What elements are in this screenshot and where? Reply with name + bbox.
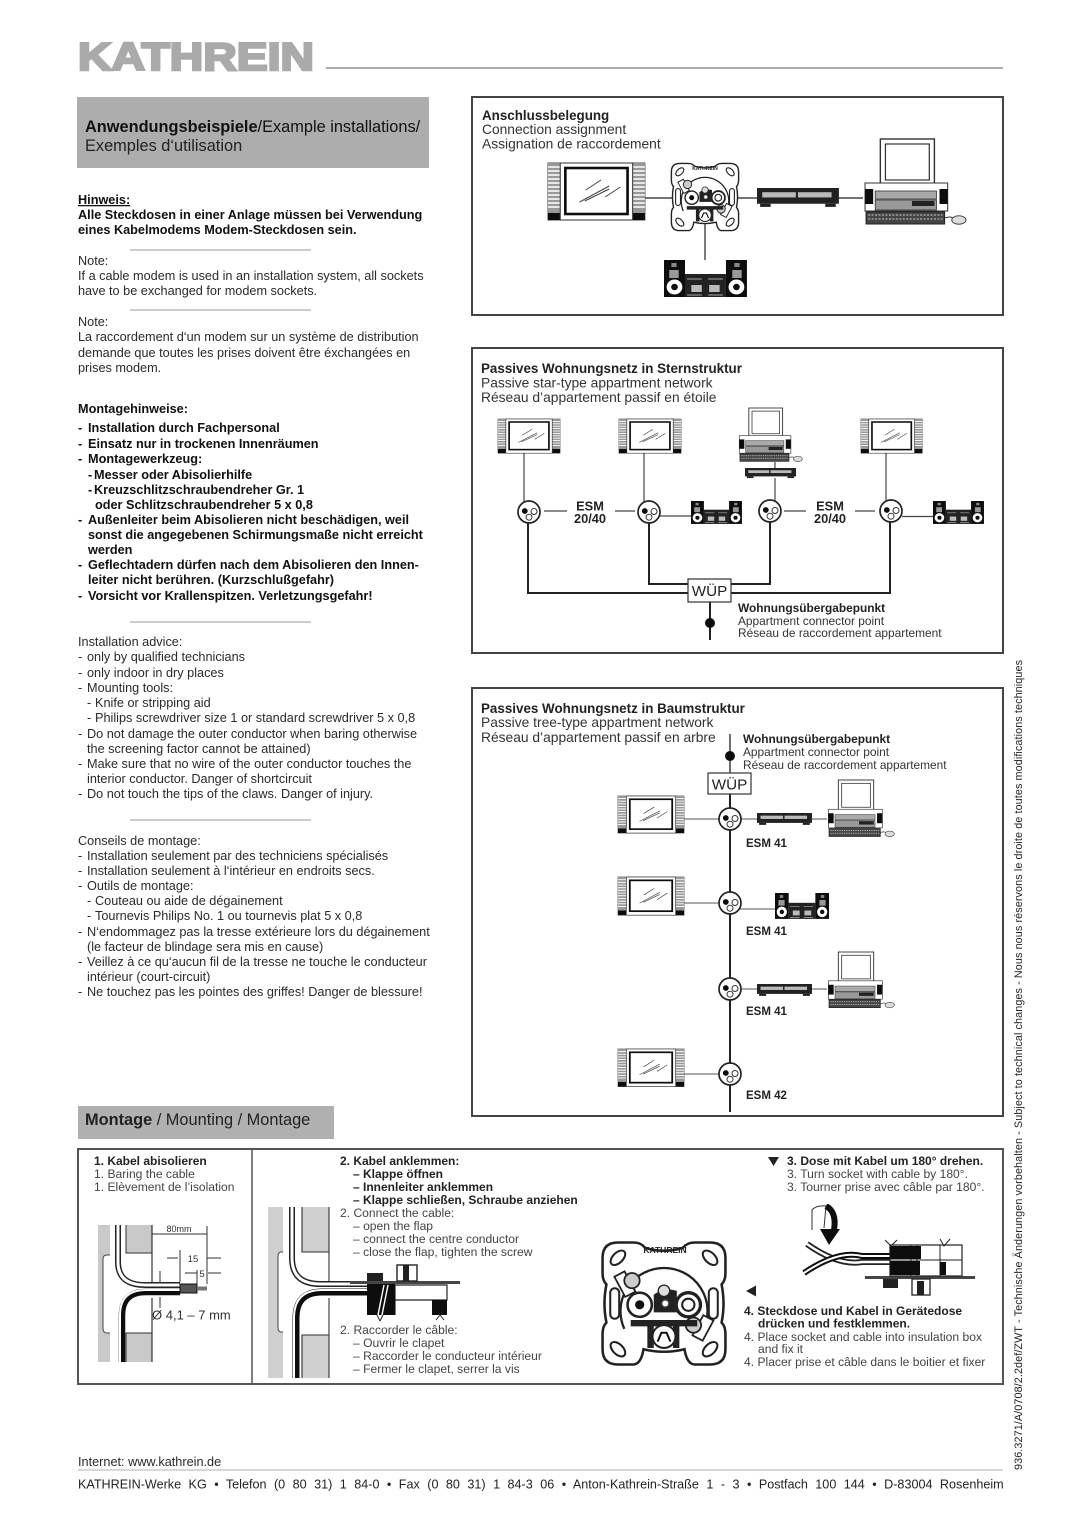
text block: Hinweis German note: Hinweis: (78, 193, 130, 207)
legend: Wohnungsübergabepunkt (738, 601, 942, 640)
heading panel: Montage (78, 1106, 334, 1139)
text block: Conseils de montage: - (87, 909, 91, 923)
text block: Montagehinweise German: sonst die angegebenen Schirmungsmaße nicht erreicht (88, 528, 424, 542)
text block: Installation advice: Knife or stripping aid (95, 696, 211, 710)
text block: English note: If a cable modem is used in an installation system, all sockets (78, 269, 424, 283)
panel heading: Anschlussbelegung (482, 108, 609, 123)
text block: Installation advice: only by qualified technicians (87, 650, 245, 664)
text block: Conseils de montage: - (78, 879, 82, 893)
arrow: step 3 down (768, 1157, 779, 1166)
text block: Conseils de montage: - (78, 849, 82, 863)
label: ESM 20/40 right: ESM (816, 498, 844, 514)
text block: Conseils de montage: - (78, 985, 82, 999)
text block: Conseils de montage: Installation seulement à l‘intérieur en endroits secs. (87, 864, 375, 878)
text block: Montagehinweise German: oder Schlitzschraubendreher 5 x 0,8 (95, 498, 313, 512)
step 2 text: – Fermer le clapet, serrer la vis (353, 1362, 520, 1376)
labels: ESM types (746, 838, 788, 1102)
socket front view with logo: KATHREIN (643, 1245, 687, 1255)
text block: Conseils de montage: Installation seulement par des techniciens spécialisés (87, 849, 388, 863)
text block: Conseils de montage: intérieur (court-circuit) (87, 970, 210, 984)
step 2 text (340, 1154, 578, 1376)
panel heading: Passives Wohnungsnetz in Sternstruktur (481, 361, 743, 376)
text block: Conseils de montage: - (78, 955, 82, 969)
legend: Wohnungsübergabepunkt: Appartment connector point (743, 745, 890, 759)
text block: Montagehinweise German: Montagewerkzeug: (88, 452, 202, 466)
step 2 text: – open the flap (353, 1219, 433, 1233)
text block: Montagehinweise German: Einsatz nur in trockenen Innenräumen (88, 437, 319, 451)
footer: internet address: Internet: www.kathrein.de (78, 1455, 221, 1469)
text block: Conseils de montage: N‘endommagez pas la tresse extérieure lors du dégainement (87, 925, 430, 939)
panel heading (481, 361, 743, 405)
panel heading: Connection assignment (482, 122, 626, 137)
panel heading: Assignation de raccordement (482, 136, 661, 152)
text block: Montagehinweise German: werden (87, 543, 132, 557)
heading panel: Anwendungsbeispiele: Exemples d‘utilisation (85, 137, 242, 155)
step 3 text (787, 1154, 985, 1194)
step 2 drawing: cable clamped (268, 1207, 460, 1378)
text block: Hinweis German note (78, 193, 422, 237)
step 4 text: drücken und festklemmen. (758, 1316, 910, 1330)
text block: Installation advice (78, 635, 417, 801)
text block: Installation advice: Make sure that no wire of the outer conductor touches the (87, 757, 411, 771)
WÜP box: WÜP (712, 776, 747, 794)
WÜP box (688, 579, 731, 602)
panel: Anschlussbelegung connection assignment (472, 97, 1003, 315)
text block: Hinweis German note: Alle Steckdosen in einer Anlage müssen bei Verwendung (78, 208, 422, 222)
labels: ESM types: ESM 41 (746, 926, 788, 938)
text block: Installation advice: only indoor in dry places (87, 666, 224, 680)
text block: French note (78, 315, 419, 375)
step 3 text: 3. Dose mit Kabel um 180° drehen. (787, 1154, 983, 1168)
legend: Wohnungsübergabepunkt: Appartment connector point (738, 614, 885, 628)
step 4 text: 4. Steckdose und Kabel in Gerätedose (744, 1304, 962, 1318)
step 3 drawing: rotating socket (804, 1206, 975, 1295)
step 1 dimensions: 15 (188, 1254, 198, 1265)
label: ESM 20/40 right: 20/40 (814, 511, 846, 526)
panel heading: Réseau d’appartement passif en étoile (481, 390, 717, 405)
text block: Installation advice: interior conductor. Danger of shortcircuit (87, 772, 312, 786)
diagram: devices around socket: KATHREIN (692, 166, 718, 172)
panel heading: Passive star-type appartment network (481, 376, 713, 390)
legend: Wohnungsübergabepunkt: Réseau de raccordement appartement (738, 626, 942, 640)
text block: French note: La raccordement d‘un modem sur un système de distribution (78, 330, 419, 344)
text block: Installation advice: Do not damage the outer conductor when baring otherwise (87, 727, 417, 741)
text block: French note: demande que toutes les prises doivent être éxchangées en (78, 346, 410, 360)
step 2 text: – close the flap, tighten the screw (353, 1245, 533, 1259)
step 2 text: 2. Raccorder le câble: (340, 1323, 458, 1337)
step 1 text (94, 1154, 235, 1194)
step 1 text: 1. Elèvement de l’isolation (94, 1180, 235, 1194)
text block: Montagehinweise German: - (78, 421, 82, 435)
arrow: step 4 left (746, 1286, 756, 1296)
text block: English note: Note: (78, 254, 108, 268)
text block: Conseils de montage: (le facteur de blindage sera mis en cause) (87, 940, 323, 954)
text block: Installation advice: Philips screwdriver size 1 or standard screwdriver 5 x 0,8 (95, 711, 415, 725)
text block: Conseils de montage: Ne touchez pas les pointes des griffes! Danger de blessure! (87, 985, 422, 999)
text block: Installation advice: - (78, 650, 82, 664)
legend: Wohnungsübergabepunkt: Wohnungsübergabepunkt (743, 732, 890, 746)
text block: French note: prises modem. (78, 361, 161, 375)
WÜP box (708, 773, 751, 794)
step 1 text: 1. Kabel abisolieren (94, 1154, 207, 1168)
labels: ESM types: ESM 41 (746, 838, 788, 850)
text block: Conseils de montage: Veillez à ce qu‘aucun fil de la tresse ne touche le conducteur (87, 955, 428, 969)
label: ESM 20/40 left: ESM (576, 498, 604, 514)
text block: Installation advice: - (87, 696, 91, 710)
heading panel: Montage: Montage / Mounting / Montage (85, 1111, 310, 1129)
step 2 text: – Innenleiter anklemmen (353, 1180, 493, 1194)
text block: Montagehinweise German: Kreuzschlitzschraubendreher Gr. 1 (94, 483, 304, 497)
step 4 text: 4. Place socket and cable into insulation box (744, 1330, 982, 1344)
step 4 text: and fix it (758, 1342, 804, 1356)
text block: Montagehinweise German: Montagehinweise: (78, 402, 188, 416)
text block: Montagehinweise German: - (88, 483, 92, 497)
text block: Conseils de montage: - (78, 925, 82, 939)
footer: company address: KATHREIN-Werke KG • Telefon (0 80 31) 1 84-0 • Fax (0 80 31) 1 84-3 06 • Anton-Kathrein-Straße 1 - 3 • Postfach 100 144 • D-83004 Rosenheim (78, 1478, 1004, 1492)
text block: English note: have to be exchanged for modem sockets. (78, 284, 317, 298)
step 2 text: – Klappe schließen, Schraube anziehen (353, 1193, 578, 1207)
text block: Conseils de montage: - (78, 864, 82, 878)
step 4 text: 4. Placer prise et câble dans le boitier et fixer (744, 1355, 985, 1369)
logo: KATHREIN: KATHREIN (78, 36, 314, 79)
text block: Montagehinweise German: - (78, 589, 82, 603)
legend: Wohnungsübergabepunkt (743, 732, 947, 772)
text block: Conseils de montage: Tournevis Philips No. 1 ou tournevis plat 5 x 0,8 (95, 909, 362, 923)
vertical side note: 936.3271/A/0708/2.2def/ZWT - Technische Änderungen vorbehalten - Subject to technical changes - Nous nous réservons le droite de toutes modifications techniques (1013, 659, 1025, 1470)
step 2 text: – connect the centre conductor (353, 1232, 519, 1246)
socket front view with logo (603, 1243, 725, 1364)
panel heading (482, 108, 661, 152)
text block: Montagehinweise German: leiter nicht berühren. (Kurzschlußgefahr) (88, 573, 334, 587)
panel heading: Réseau d’appartement passif en arbre (481, 730, 716, 745)
text block: Installation advice: - (87, 711, 91, 725)
step 1 dimensions: Ø 4,1 – 7 mm (152, 1308, 231, 1322)
text block: Installation advice: - (78, 666, 82, 680)
step 2 text: 2. Connect the cable: (340, 1206, 454, 1220)
text block: English note (78, 254, 424, 298)
step 2 text: – Raccorder le conducteur intérieur (353, 1349, 542, 1363)
text block: Montagehinweise German: Außenleiter beim Abisolieren nicht beschädigen, weil (88, 513, 409, 527)
step 1 text: 1. Baring the cable (94, 1167, 195, 1181)
text block: Installation advice: - (78, 787, 82, 801)
label: ESM 20/40 left: 20/40 (574, 511, 606, 526)
text block: Installation advice: the screening factor cannot be attained) (87, 742, 311, 756)
legend: Wohnungsübergabepunkt: Wohnungsübergabepunkt (738, 601, 885, 615)
text block: Montagehinweise German: Vorsicht vor Krallenspitzen. Verletzungsgefahr! (88, 589, 373, 603)
step 3 text: 3. Tourner prise avec câble par 180°. (787, 1180, 985, 1194)
star diagram (498, 408, 984, 640)
text block: Montagehinweise German: Geflechtadern dürfen nach dem Abisolieren den Innen- (88, 558, 419, 572)
tree diagram (618, 734, 894, 1112)
text block: Montagehinweise German (78, 402, 424, 603)
step 1 dimensions: 80mm (166, 1224, 192, 1234)
panel: Baumstruktur tree network (472, 688, 1003, 1116)
text block: Montagehinweise German: - (78, 437, 82, 451)
text block: Montagehinweise German: - (78, 513, 82, 527)
text block: Conseils de montage (78, 834, 430, 999)
text block: Conseils de montage: Couteau ou aide de dégainement (95, 894, 283, 908)
step 4 text (744, 1304, 985, 1369)
step 1 dimensions: 5 (199, 1269, 205, 1280)
text block: Installation advice: Installation advice: (78, 635, 182, 649)
text block: French note: Note: (78, 315, 108, 329)
legend: Wohnungsübergabepunkt: Réseau de raccordement appartement (743, 758, 947, 772)
diagram: devices around socket (548, 139, 966, 297)
WÜP box: WÜP (692, 582, 727, 600)
step 2 text: – Klappe öffnen (353, 1167, 443, 1181)
step 1 drawing: bared cable in wall (98, 1225, 221, 1362)
text block: Conseils de montage: Conseils de montage: (78, 834, 201, 848)
text block: Montagehinweise German: - (88, 468, 92, 482)
labels: ESM types: ESM 42 (746, 1090, 787, 1102)
text block: Hinweis German note: eines Kabelmodems Modem-Steckdosen sein. (78, 223, 357, 237)
step 2 text: – Ouvrir le clapet (353, 1336, 445, 1350)
text block: Installation advice: Do not touch the tips of the claws. Danger of injury. (87, 787, 373, 801)
text block: Montagehinweise German: Installation durch Fachpersonal (88, 421, 280, 435)
step 1 dimensions (152, 1224, 231, 1322)
text block: Conseils de montage: Outils de montage: (87, 879, 194, 893)
text block: Conseils de montage: - (87, 894, 91, 908)
panel: mounting steps (78, 1149, 1003, 1384)
panel heading: Passive tree-type appartment network (481, 715, 713, 730)
text block: Montagehinweise German: Messer oder Abisolierhilfe (94, 468, 252, 482)
text block: Installation advice: Mounting tools: (87, 681, 173, 695)
panel heading (481, 701, 746, 745)
step 3 text: 3. Turn socket with cable by 180°. (787, 1167, 968, 1181)
text block: Montagehinweise German: - (78, 452, 82, 466)
panel heading: Passives Wohnungsnetz in Baumstruktur (481, 701, 746, 716)
labels: ESM types: ESM 41 (746, 1006, 788, 1018)
panel: Sternstruktur star network (472, 348, 1003, 653)
step 2 text: 2. Kabel anklemmen: (340, 1154, 459, 1168)
heading panel: Anwendungsbeispiele: Anwendungsbeispiele/Example installations/ (85, 118, 421, 136)
heading panel: Anwendungsbeispiele (77, 97, 429, 168)
text block: Installation advice: - (78, 757, 82, 771)
text block: Installation advice: - (78, 681, 82, 695)
text block: Montagehinweise German: - (78, 558, 82, 572)
text block: Installation advice: - (78, 727, 82, 741)
